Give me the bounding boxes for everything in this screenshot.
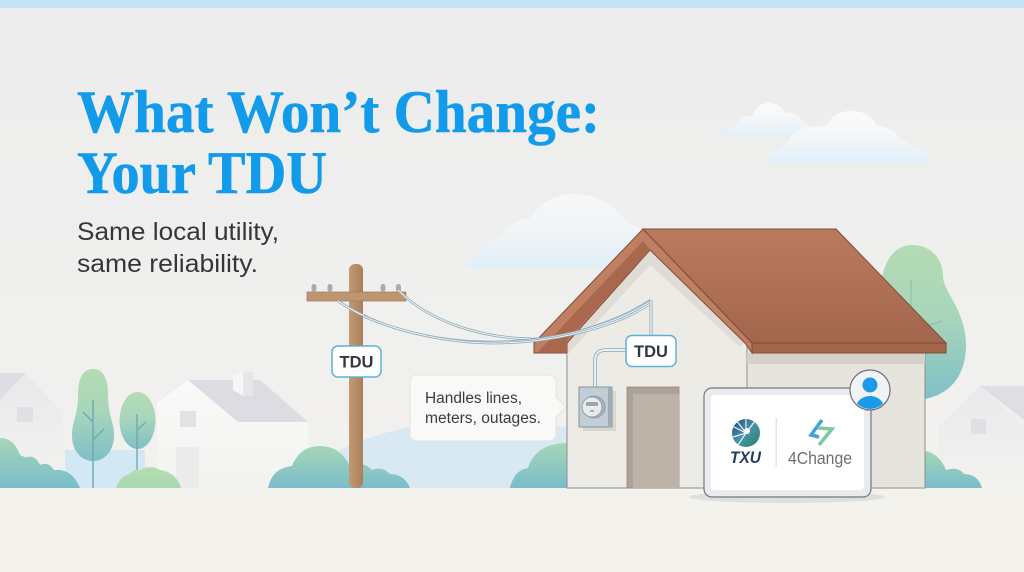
title bbox=[77, 79, 600, 206]
callout bbox=[410, 375, 566, 441]
hill bbox=[280, 423, 570, 488]
water patch bbox=[65, 450, 145, 488]
electric meter bbox=[579, 387, 616, 431]
label: TDU on house: TDU bbox=[634, 343, 668, 361]
title: Your TDU bbox=[77, 140, 327, 206]
bush: green bbox=[116, 467, 181, 488]
TXU logo: TXU bbox=[730, 448, 762, 467]
cloud: small bbox=[718, 103, 812, 136]
background house: centre left bbox=[157, 372, 308, 488]
tree: small bbox=[120, 392, 156, 472]
background house: far left bbox=[0, 373, 63, 488]
label: TDU on pole bbox=[332, 346, 381, 377]
brand card bbox=[704, 388, 871, 497]
label: TDU on house bbox=[626, 336, 676, 366]
ground bbox=[0, 488, 1024, 572]
subtitle bbox=[77, 218, 279, 278]
bush: far left bbox=[0, 438, 80, 488]
door bbox=[627, 387, 679, 488]
gable trim bbox=[534, 229, 752, 353]
roof front fascia bbox=[752, 343, 946, 353]
label: TDU on pole: TDU bbox=[340, 354, 373, 372]
bush: right of house bbox=[870, 450, 982, 488]
4Change logo bbox=[788, 420, 852, 468]
tree: behind house bbox=[880, 245, 966, 400]
roof main plane bbox=[643, 229, 946, 343]
background house: far right bbox=[938, 386, 1024, 488]
callout: Handles lines, bbox=[425, 390, 522, 407]
house bbox=[534, 229, 946, 488]
title: What Won’t Change: bbox=[77, 79, 600, 145]
bush: by house bbox=[510, 443, 568, 488]
subtitle: same reliability. bbox=[77, 250, 258, 278]
subtitle: Same local utility, bbox=[77, 218, 279, 246]
card shadow bbox=[689, 491, 885, 503]
house walls bbox=[567, 250, 747, 488]
4Change logo: 4Change bbox=[788, 448, 852, 468]
avatar icon bbox=[849, 369, 891, 411]
cloud: large bbox=[768, 111, 928, 162]
card divider bbox=[776, 418, 777, 467]
TXU logo bbox=[730, 419, 762, 467]
utility pole bbox=[307, 264, 406, 488]
cloud: behind house bbox=[465, 194, 660, 268]
tree: tall bbox=[72, 369, 114, 488]
bush: centre bbox=[268, 446, 410, 488]
top colour band bbox=[0, 0, 1024, 8]
wires bbox=[338, 290, 651, 387]
callout: meters, outages. bbox=[425, 410, 541, 427]
